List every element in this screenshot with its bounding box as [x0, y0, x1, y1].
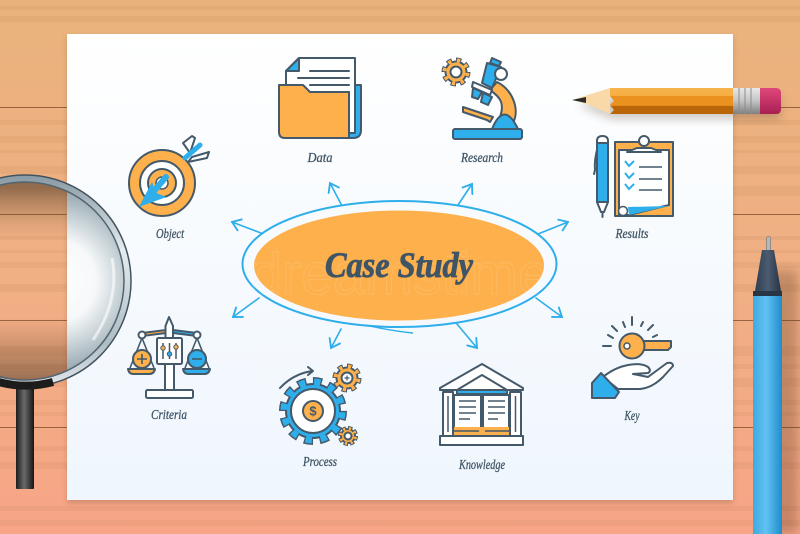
label: Data — [307, 151, 332, 166]
radiating arrows — [232, 183, 568, 348]
label: Process — [302, 455, 337, 470]
icon: results clipboard and pen — [594, 136, 673, 242]
icon: key over hand — [592, 317, 673, 424]
icon: knowledge library — [440, 364, 523, 473]
paper sheet — [67, 34, 733, 503]
icon: data folder — [279, 58, 361, 166]
icon: research microscope — [444, 58, 522, 166]
icon: process gears: $ — [309, 404, 317, 418]
label: Object — [156, 227, 185, 242]
label: Knowledge — [458, 458, 505, 473]
label: Criteria — [151, 408, 187, 423]
label: Key — [624, 409, 640, 424]
central ellipse: Case Study — [242, 201, 556, 333]
icon: object target — [129, 136, 209, 242]
heading: Case Study — [325, 245, 474, 285]
pencil — [572, 88, 781, 119]
label: Results — [615, 227, 649, 242]
watermark: dreamstime — [250, 242, 550, 307]
magnifying glass — [0, 170, 137, 489]
ballpoint pen — [753, 236, 798, 534]
icon: process gears — [280, 366, 360, 470]
icon: criteria scales — [128, 317, 210, 423]
label: Research — [460, 151, 503, 166]
